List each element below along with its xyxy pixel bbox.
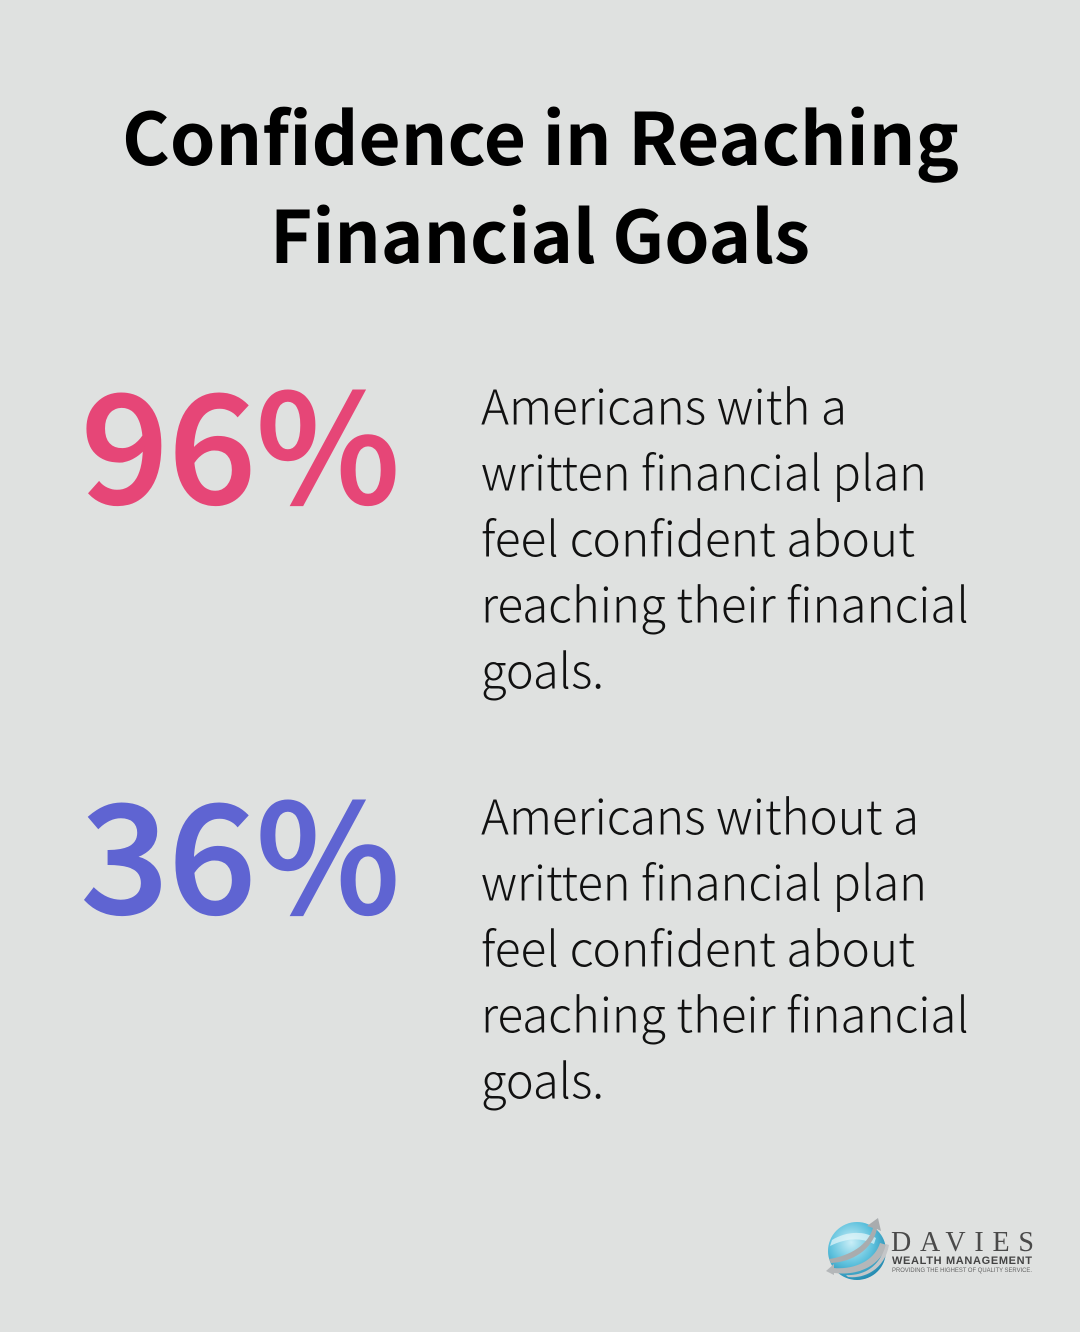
text block: Americans without a written plan: [481, 778, 969, 1112]
statistic: 96%: 96%: [81, 330, 400, 547]
text block: Americans with a written plan: Americans with a: [481, 368, 847, 438]
text block: Americans with a written plan: [481, 368, 969, 702]
title: Financial Goals: [270, 179, 810, 284]
logo: Davies Wealth Management: [826, 1218, 1034, 1280]
text block: Americans with a written plan: feel confident about: [481, 500, 915, 570]
text block: Americans with a written plan: goals.: [481, 632, 604, 702]
text block: Americans with a written plan: written financial plan: [481, 434, 927, 504]
logo wordmark: DAVIES: [891, 1227, 1034, 1258]
logo tagline: PROVIDING THE HIGHEST OF QUALITY SERVICE.: [892, 1267, 1032, 1274]
icon: globe with arrows: [826, 1218, 889, 1280]
text block: Americans without a written plan: feel confident about: [481, 910, 915, 980]
text block: Americans without a written plan: reaching their financial: [481, 976, 969, 1046]
title: Confidence in Reaching: [122, 81, 959, 186]
statistic: 36%: 36%: [81, 740, 400, 957]
text block: Americans without a written plan: written financial plan: [481, 844, 927, 914]
logo subtitle: WEALTH MANAGEMENT: [892, 1255, 1032, 1267]
text block: Americans with a written plan: reaching their financial: [481, 566, 969, 636]
text block: Americans without a written plan: Americans without a: [481, 778, 919, 848]
text block: Americans without a written plan: goals.: [481, 1042, 604, 1112]
title: [122, 81, 959, 284]
